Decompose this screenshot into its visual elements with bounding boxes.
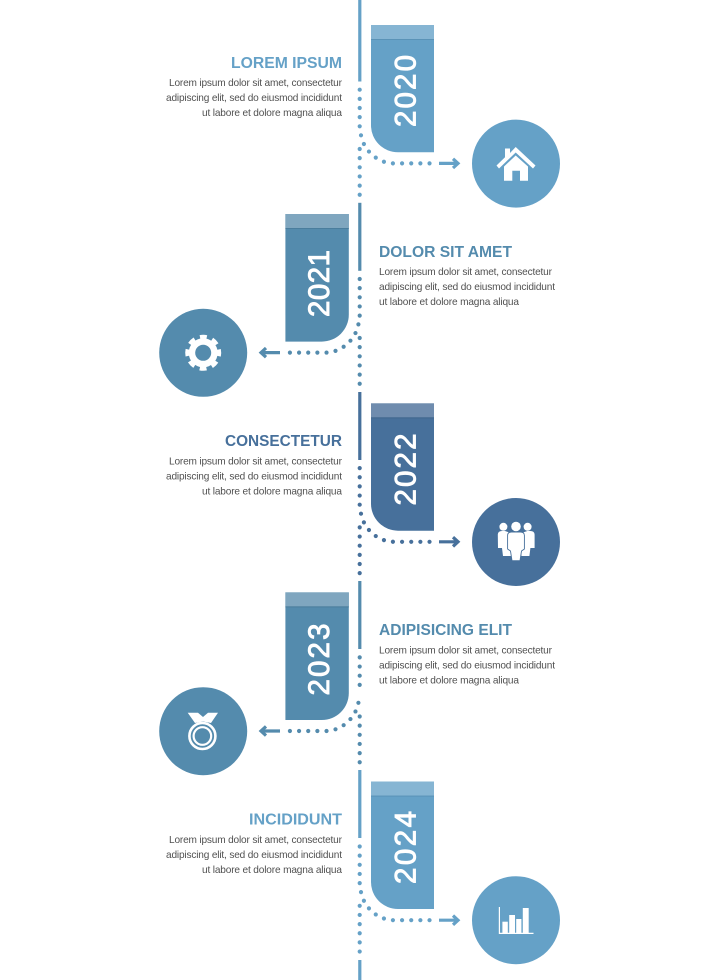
body text 2024: adipiscing elit, sed do eiusmod incididunt <box>166 850 342 861</box>
body text 2023: ut labore et dolore magna aliqua <box>379 676 519 686</box>
heading: incididunt: INCIDIDUNT <box>249 812 343 828</box>
year tab 2022 <box>371 403 434 531</box>
body text 2023 <box>379 646 555 686</box>
curved dotted connector and arrow 2024 <box>361 892 458 925</box>
body text 2022: ut labore et dolore magna aliqua <box>202 486 342 498</box>
heading: consectetur: CONSECTETUR <box>225 433 342 450</box>
heading: adipisicing elit: ADIPISICING ELIT <box>379 622 513 639</box>
icon: bar chart <box>472 876 560 964</box>
body text 2022 <box>166 456 343 498</box>
body text 2024: Lorem ipsum dolor sit amet, consectetur <box>169 835 343 846</box>
body text 2023: Lorem ipsum dolor sit amet, consectetur <box>379 646 553 656</box>
year tab 2022: 2022 <box>390 434 422 506</box>
year tab 2023: 2023 <box>303 624 336 696</box>
body text 2020: Lorem ipsum dolor sit amet, consectetur <box>169 78 343 89</box>
heading: dolor sit amet: DOLOR SIT AMET <box>379 244 513 261</box>
year tab 2020: 2020 <box>390 55 422 127</box>
year tab 2024: 2024 <box>390 811 422 884</box>
body text 2020: ut labore et dolore magna aliqua <box>202 108 342 119</box>
year tab 2023 <box>285 592 349 720</box>
body text 2024 <box>166 835 343 876</box>
year tab 2021: 2021 <box>303 250 336 317</box>
body text 2021: adipiscing elit, sed do eiusmod incididunt <box>379 282 555 293</box>
year tab 2020 <box>371 25 434 152</box>
body text 2023: adipiscing elit, sed do eiusmod incididunt <box>379 660 555 672</box>
year tab 2021 <box>285 214 349 342</box>
milestone 2020 <box>166 0 560 208</box>
milestone 2022 <box>166 392 560 586</box>
heading: lorem ipsum: LOREM IPSUM <box>231 55 342 72</box>
body text 2022: Lorem ipsum dolor sit amet, consectetur <box>169 456 343 468</box>
milestone 2021 <box>159 203 555 397</box>
body text 2020: adipiscing elit, sed do eiusmod incididunt <box>166 93 342 104</box>
body text 2021: Lorem ipsum dolor sit amet, consectetur <box>379 267 553 278</box>
milestone 2024 <box>166 770 560 980</box>
milestone 2023 <box>159 581 555 775</box>
icon: gear <box>159 309 247 397</box>
curved dotted connector and arrow 2023 <box>261 703 358 736</box>
icon: house <box>472 120 560 208</box>
year tab 2024 <box>371 782 434 909</box>
icon: medal <box>159 687 247 775</box>
icon: people <box>472 498 560 586</box>
curved dotted connector and arrow 2022 <box>361 514 458 546</box>
body text 2020 <box>166 78 343 119</box>
body text 2021: ut labore et dolore magna aliqua <box>379 297 519 308</box>
curved dotted connector and arrow 2021 <box>261 324 358 357</box>
curved dotted connector and arrow 2020 <box>361 135 458 168</box>
body text 2021 <box>379 267 555 308</box>
body text 2022: adipiscing elit, sed do eiusmod incididunt <box>166 472 342 482</box>
body text 2024: ut labore et dolore magna aliqua <box>202 865 342 876</box>
